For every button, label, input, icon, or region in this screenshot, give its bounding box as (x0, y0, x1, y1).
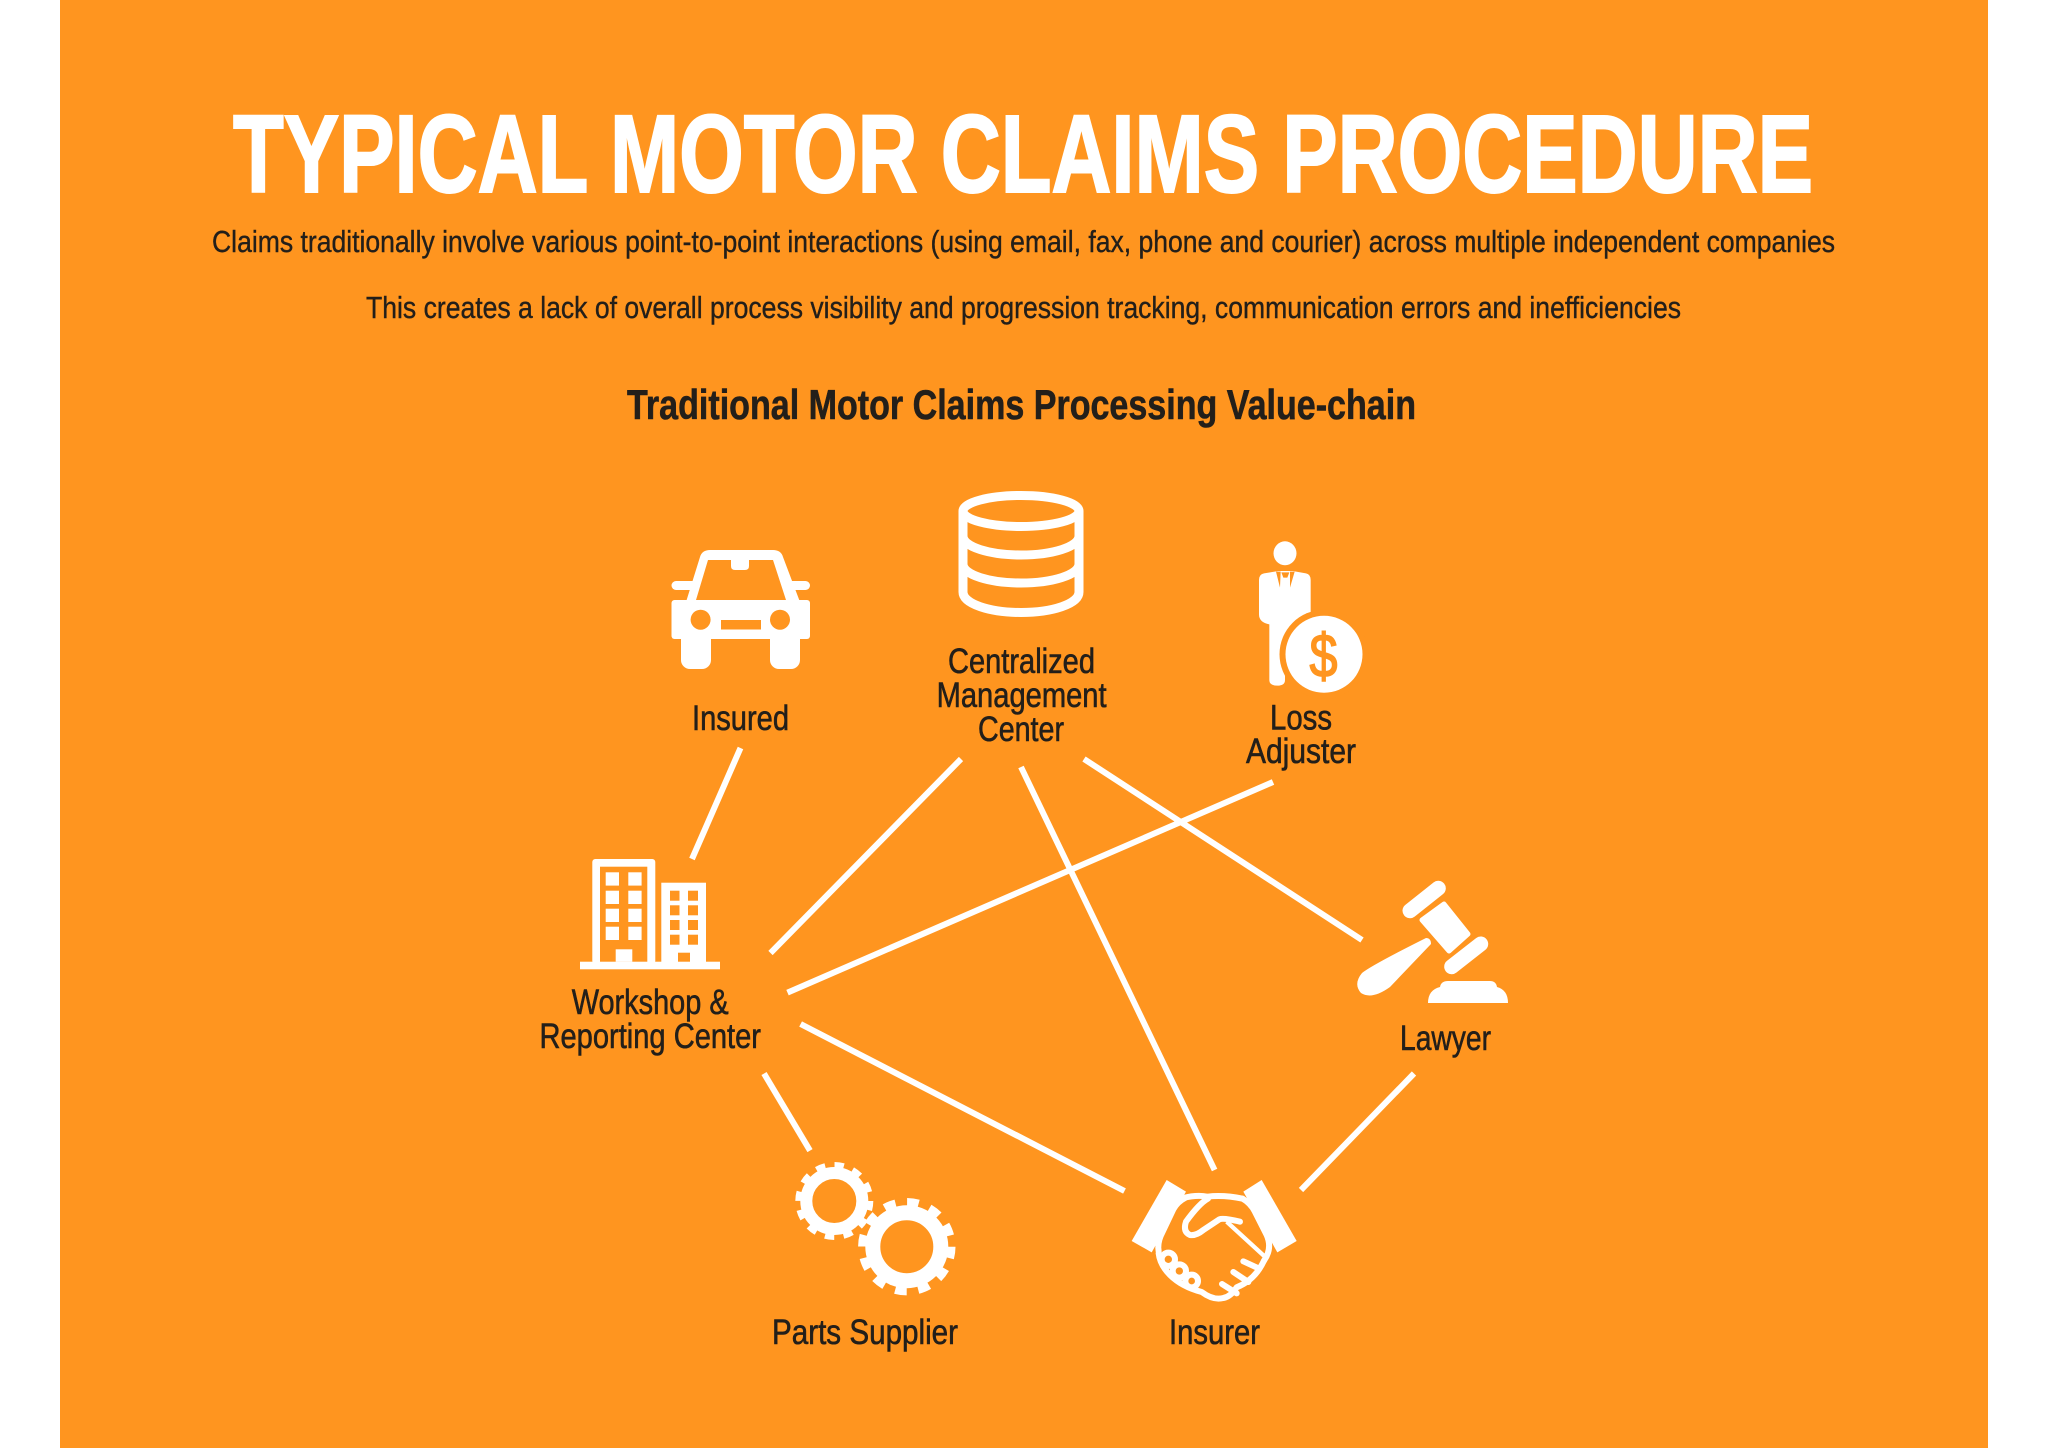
label: Parts Supplier: Parts Supplier (772, 1313, 958, 1352)
icon: gavel (1357, 888, 1508, 1003)
label: Workshop & Reporting Center: Reporting Center (540, 1017, 761, 1056)
icon: buildings (580, 859, 720, 969)
connector lines network (692, 748, 1414, 1191)
node: Lawyer (1357, 888, 1508, 1058)
label: Workshop & Reporting Center: Workshop & (572, 983, 729, 1022)
label: Centralized Management Center: Center (978, 710, 1064, 749)
icon: handshake (1132, 1180, 1297, 1299)
section heading: Traditional Motor Claims Processing Value-chain (627, 381, 1416, 428)
icon: adjuster with dollar coin: $ (1310, 622, 1338, 690)
node: Parts Supplier (772, 1166, 958, 1352)
icon: car (672, 550, 810, 669)
icon: adjuster with dollar coin (1259, 541, 1368, 699)
label: Centralized Management Center (937, 642, 1107, 749)
label: Loss Adjuster (1246, 698, 1356, 771)
node: Insurer (1132, 1180, 1297, 1352)
label: Loss Adjuster: Loss (1270, 698, 1332, 738)
node: Loss Adjuster (1246, 541, 1368, 771)
label: Centralized Management Center: Centralized (948, 642, 1095, 681)
icon: database (963, 496, 1079, 612)
label: Lawyer: Lawyer (1400, 1019, 1491, 1058)
label: Loss Adjuster: Adjuster (1246, 732, 1356, 771)
label: Centralized Management Center: Management (937, 676, 1107, 715)
node: Insured (672, 550, 810, 738)
label: Insurer: Insurer (1169, 1313, 1260, 1352)
icon: gears (799, 1166, 952, 1291)
node: Centralized Management Center (937, 496, 1107, 749)
intro text line 2: This creates a lack of overall process visibility and progression tracking, communication errors and inefficiencies (366, 290, 1681, 325)
node: Workshop & Reporting Center (540, 859, 761, 1056)
label: Insured: Insured (692, 699, 789, 738)
label: Workshop & Reporting Center (540, 983, 761, 1056)
